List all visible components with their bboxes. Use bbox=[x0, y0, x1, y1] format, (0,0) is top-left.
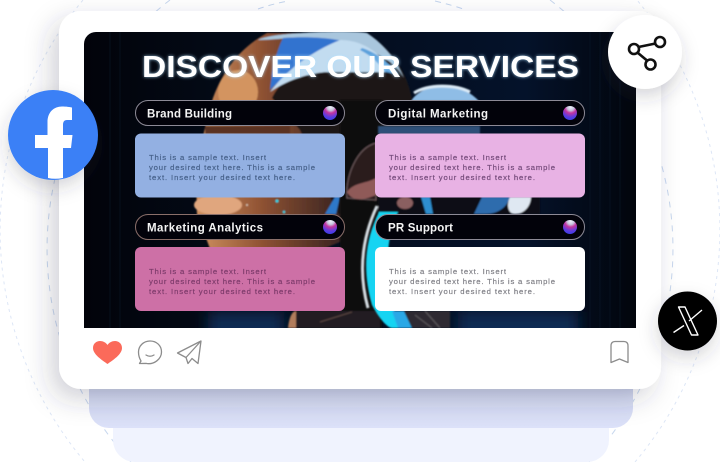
helmet dark interior bbox=[272, 72, 412, 214]
pill heading: Brand Building bbox=[147, 108, 232, 120]
helmet pale rim bbox=[258, 32, 404, 78]
text panel: text. Insert your desired text here. bbox=[149, 287, 295, 296]
central shadow, ear and collar bbox=[288, 100, 382, 328]
text panel: This is a sample text. Insert bbox=[149, 153, 267, 162]
icon: send plane bbox=[178, 341, 201, 364]
poster background artwork bbox=[84, 32, 636, 342]
pill heading bbox=[136, 100, 344, 126]
poster title: DISCOVER OUR SERVICES bbox=[142, 49, 579, 84]
text panel bbox=[135, 247, 345, 311]
left head bbox=[194, 32, 412, 262]
text panel: This is a sample text. Insert bbox=[389, 153, 507, 162]
icon: Facebook badge bbox=[8, 90, 98, 180]
pill heading: Digital Marketing bbox=[388, 108, 488, 120]
right head bbox=[362, 86, 540, 328]
text panel bbox=[135, 134, 345, 198]
text panel: your desired text here. This is a sample bbox=[149, 277, 315, 286]
helmet blue band bbox=[270, 37, 350, 90]
service: PR Support bbox=[375, 214, 585, 311]
pill heading bbox=[376, 214, 584, 240]
back layer: lower card bbox=[113, 380, 609, 462]
poster image bbox=[84, 32, 636, 342]
text panel: your desired text here. This is a sample bbox=[149, 163, 315, 172]
text panel: This is a sample text. Insert bbox=[149, 267, 267, 276]
bottom navy glow bbox=[200, 311, 585, 328]
text panel bbox=[375, 247, 585, 311]
text panel: text. Insert your desired text here. bbox=[389, 173, 535, 182]
icon: heart bbox=[93, 341, 122, 364]
cyan arc bbox=[366, 212, 402, 328]
text panel: text. Insert your desired text here. bbox=[389, 287, 535, 296]
pill heading: Marketing Analytics bbox=[147, 222, 263, 234]
service: Brand Building bbox=[135, 100, 345, 198]
pill heading bbox=[376, 100, 584, 126]
pill heading: PR Support bbox=[388, 222, 453, 234]
blue slash and sparks bbox=[325, 197, 340, 214]
service: Digital Marketing bbox=[375, 100, 585, 198]
icon: share badge bbox=[608, 15, 682, 89]
pill heading bbox=[136, 214, 344, 240]
main post card bbox=[59, 11, 661, 389]
back layer: middle card bbox=[89, 360, 633, 428]
text panel: text. Insert your desired text here. bbox=[149, 173, 295, 182]
text panel: your desired text here. This is a sample bbox=[389, 163, 555, 172]
helmet white band bbox=[270, 40, 392, 92]
text panel bbox=[375, 134, 585, 198]
text panel: This is a sample text. Insert bbox=[389, 267, 507, 276]
service: Marketing Analytics bbox=[135, 214, 345, 311]
icon: comment bubble bbox=[138, 341, 162, 364]
text panel: your desired text here. This is a sample bbox=[389, 277, 555, 286]
icon: bookmark bbox=[611, 342, 628, 362]
icon: X badge bbox=[658, 292, 717, 350]
